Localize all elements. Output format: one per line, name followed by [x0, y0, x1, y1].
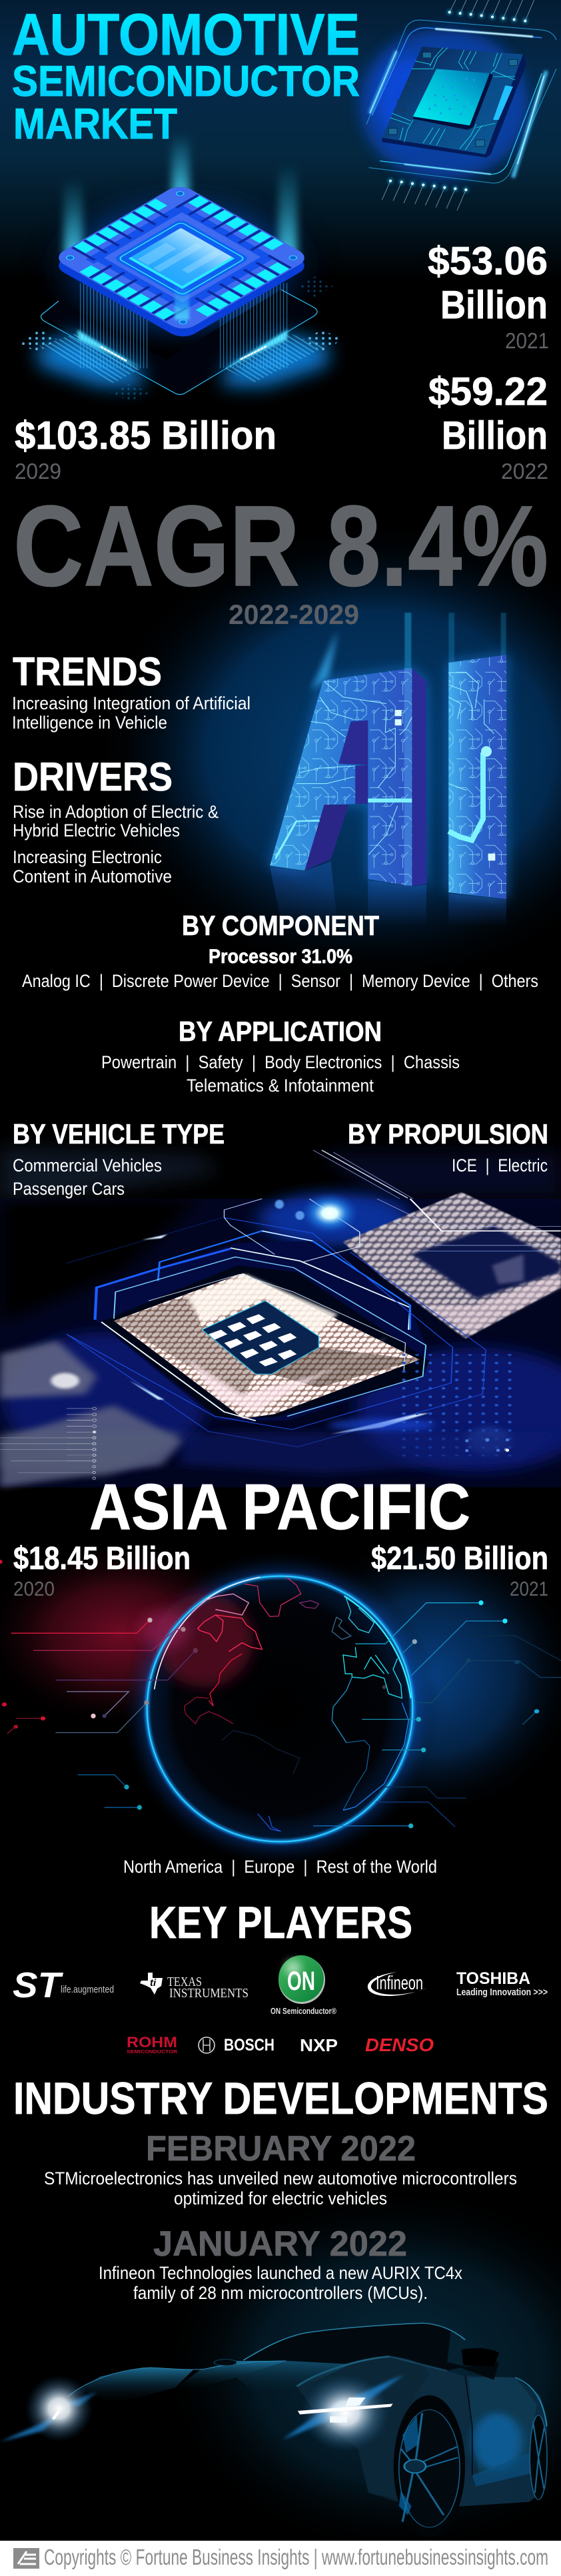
icon: right circuit chip	[360, 0, 556, 210]
stat: 2022 market size: Billion	[442, 414, 548, 458]
logo: Infineon: Infineon	[376, 1973, 423, 1994]
development: January 2022: Infineon Technologies launched a new AURIX TC4x	[99, 2263, 462, 2283]
development: February 2022: optimized for electric vehicles	[174, 2188, 387, 2208]
logo: Rohm: SEMICONDUCTOR	[127, 2050, 177, 2055]
logo: STMicroelectronics	[13, 1965, 114, 2005]
development: January 2022: family of 28 nm microcontrollers (MCUs).	[133, 2283, 428, 2303]
panel: drivers: Content in Automotive	[13, 866, 172, 886]
stat: Asia Pacific 2021: 2021	[510, 1577, 548, 1600]
stat: Asia Pacific 2021	[371, 1541, 548, 1600]
CAGR period: 2022-2029	[229, 599, 359, 630]
heading: Asia Pacific: ASIA PACIFIC	[89, 1470, 470, 1543]
heading: by application: Powertrain | Safety | Body Electronics | Chassis	[101, 1052, 460, 1072]
panel: trends: Increasing Integration of Artificial	[12, 693, 251, 713]
heading: by vehicle type: Passenger Cars	[13, 1179, 125, 1199]
stat: 2029 market size: $103.85 Billion	[15, 414, 277, 458]
logo: ON Semiconductor: ON Semiconductor®	[271, 2006, 336, 2016]
heading: by component: BY COMPONENT	[182, 910, 379, 941]
car glow	[160, 2184, 561, 2557]
stat: Asia Pacific 2020	[13, 1541, 191, 1600]
logo: ON Semiconductor: ON	[287, 1967, 315, 1996]
panel: trends	[12, 649, 251, 733]
globe illustration	[0, 1533, 561, 1869]
logo: Texas Instruments: ti	[150, 1977, 157, 1989]
stat: 2029 market size	[15, 414, 277, 483]
panel: trends: TRENDS	[13, 649, 162, 694]
development: February 2022: STMicroelectronics has unveiled new automotive microcontrollers	[44, 2168, 517, 2188]
title: SEMICONDUCTOR	[12, 57, 360, 105]
heading: by vehicle type: Commercial Vehicles	[13, 1155, 162, 1175]
stat: 2021 market size: 2021	[505, 328, 549, 353]
heading: by vehicle type: BY VEHICLE TYPE	[13, 1118, 225, 1149]
development: January 2022	[99, 2224, 462, 2303]
logo: Rohm: ROHM	[127, 2034, 177, 2051]
heading: by application: Telematics & Infotainment	[187, 1076, 374, 1096]
logo: Texas Instruments: TEXAS	[167, 1975, 202, 1989]
panel: trends: Intelligence in Vehicle	[12, 713, 167, 733]
stat: 2029 market size: 2029	[15, 459, 61, 483]
title: MARKET	[13, 99, 177, 148]
stat: 2021 market size: $53.06	[428, 239, 548, 283]
logo: STMicroelectronics: ST	[13, 1965, 63, 2005]
stat: Asia Pacific 2020: 2020	[13, 1577, 55, 1600]
panel: drivers	[13, 755, 219, 886]
heading: by propulsion	[348, 1118, 548, 1175]
logo: Bosch	[199, 2036, 275, 2055]
panel: drivers: Hybrid Electric Vehicles	[13, 820, 180, 840]
stat: 2022 market size: 2022	[501, 459, 548, 483]
stat: 2021 market size: Billion	[440, 283, 548, 327]
stat: 2022 market size	[428, 370, 548, 483]
car illustration	[0, 2323, 548, 2537]
logo: Toshiba: TOSHIBA	[456, 1969, 530, 1988]
heading: key players: KEY PLAYERS	[149, 1897, 412, 1948]
title: AUTOMOTIVE	[12, 1, 360, 67]
logo: ON Semiconductor	[271, 1955, 336, 2016]
heading: by vehicle type	[13, 1118, 225, 1199]
heading: by component: Processor 31.0%	[209, 946, 352, 968]
title	[12, 1, 360, 148]
icon: AI circuit letters	[270, 613, 506, 926]
heading: by application: BY APPLICATION	[179, 1016, 382, 1047]
development: February 2022: FEBRUARY 2022	[146, 2129, 416, 2168]
icon: left isometric processor chip	[18, 133, 342, 401]
logo: Bosch: BOSCH	[224, 2036, 275, 2055]
heading: by application	[101, 1016, 460, 1096]
logo: NXP: NXP	[300, 2035, 338, 2055]
panel: drivers: Increasing Electronic	[13, 847, 162, 867]
heading: by component	[22, 910, 538, 991]
AI section glow	[93, 519, 561, 986]
development: January 2022: JANUARY 2022	[153, 2224, 407, 2264]
logo: Infineon	[368, 1972, 428, 1996]
processor illustration	[0, 1147, 561, 1487]
logo: STMicroelectronics: life.augmented	[61, 1984, 114, 1995]
footer	[0, 2541, 561, 2576]
stat: 2021 market size	[428, 239, 549, 353]
logo: Toshiba	[456, 1969, 548, 1998]
logo: Denso: DENSO	[365, 2035, 434, 2055]
logo: Texas Instruments: INSTRUMENTS	[169, 1986, 249, 2001]
panel: drivers: Rise in Adoption of Electric &	[13, 802, 219, 822]
stat: Asia Pacific 2020: $18.45 Billion	[13, 1541, 191, 1576]
header background gradient	[0, 0, 561, 280]
text: other regions: North America | Europe | Rest of the World	[123, 1857, 437, 1877]
development: February 2022	[44, 2129, 517, 2208]
logo: Texas Instruments	[140, 1973, 249, 2001]
stat: 2022 market size: $59.22	[428, 370, 548, 414]
panel: drivers: DRIVERS	[13, 755, 173, 799]
icon: Fortune Business Insights logo	[13, 2548, 39, 2569]
